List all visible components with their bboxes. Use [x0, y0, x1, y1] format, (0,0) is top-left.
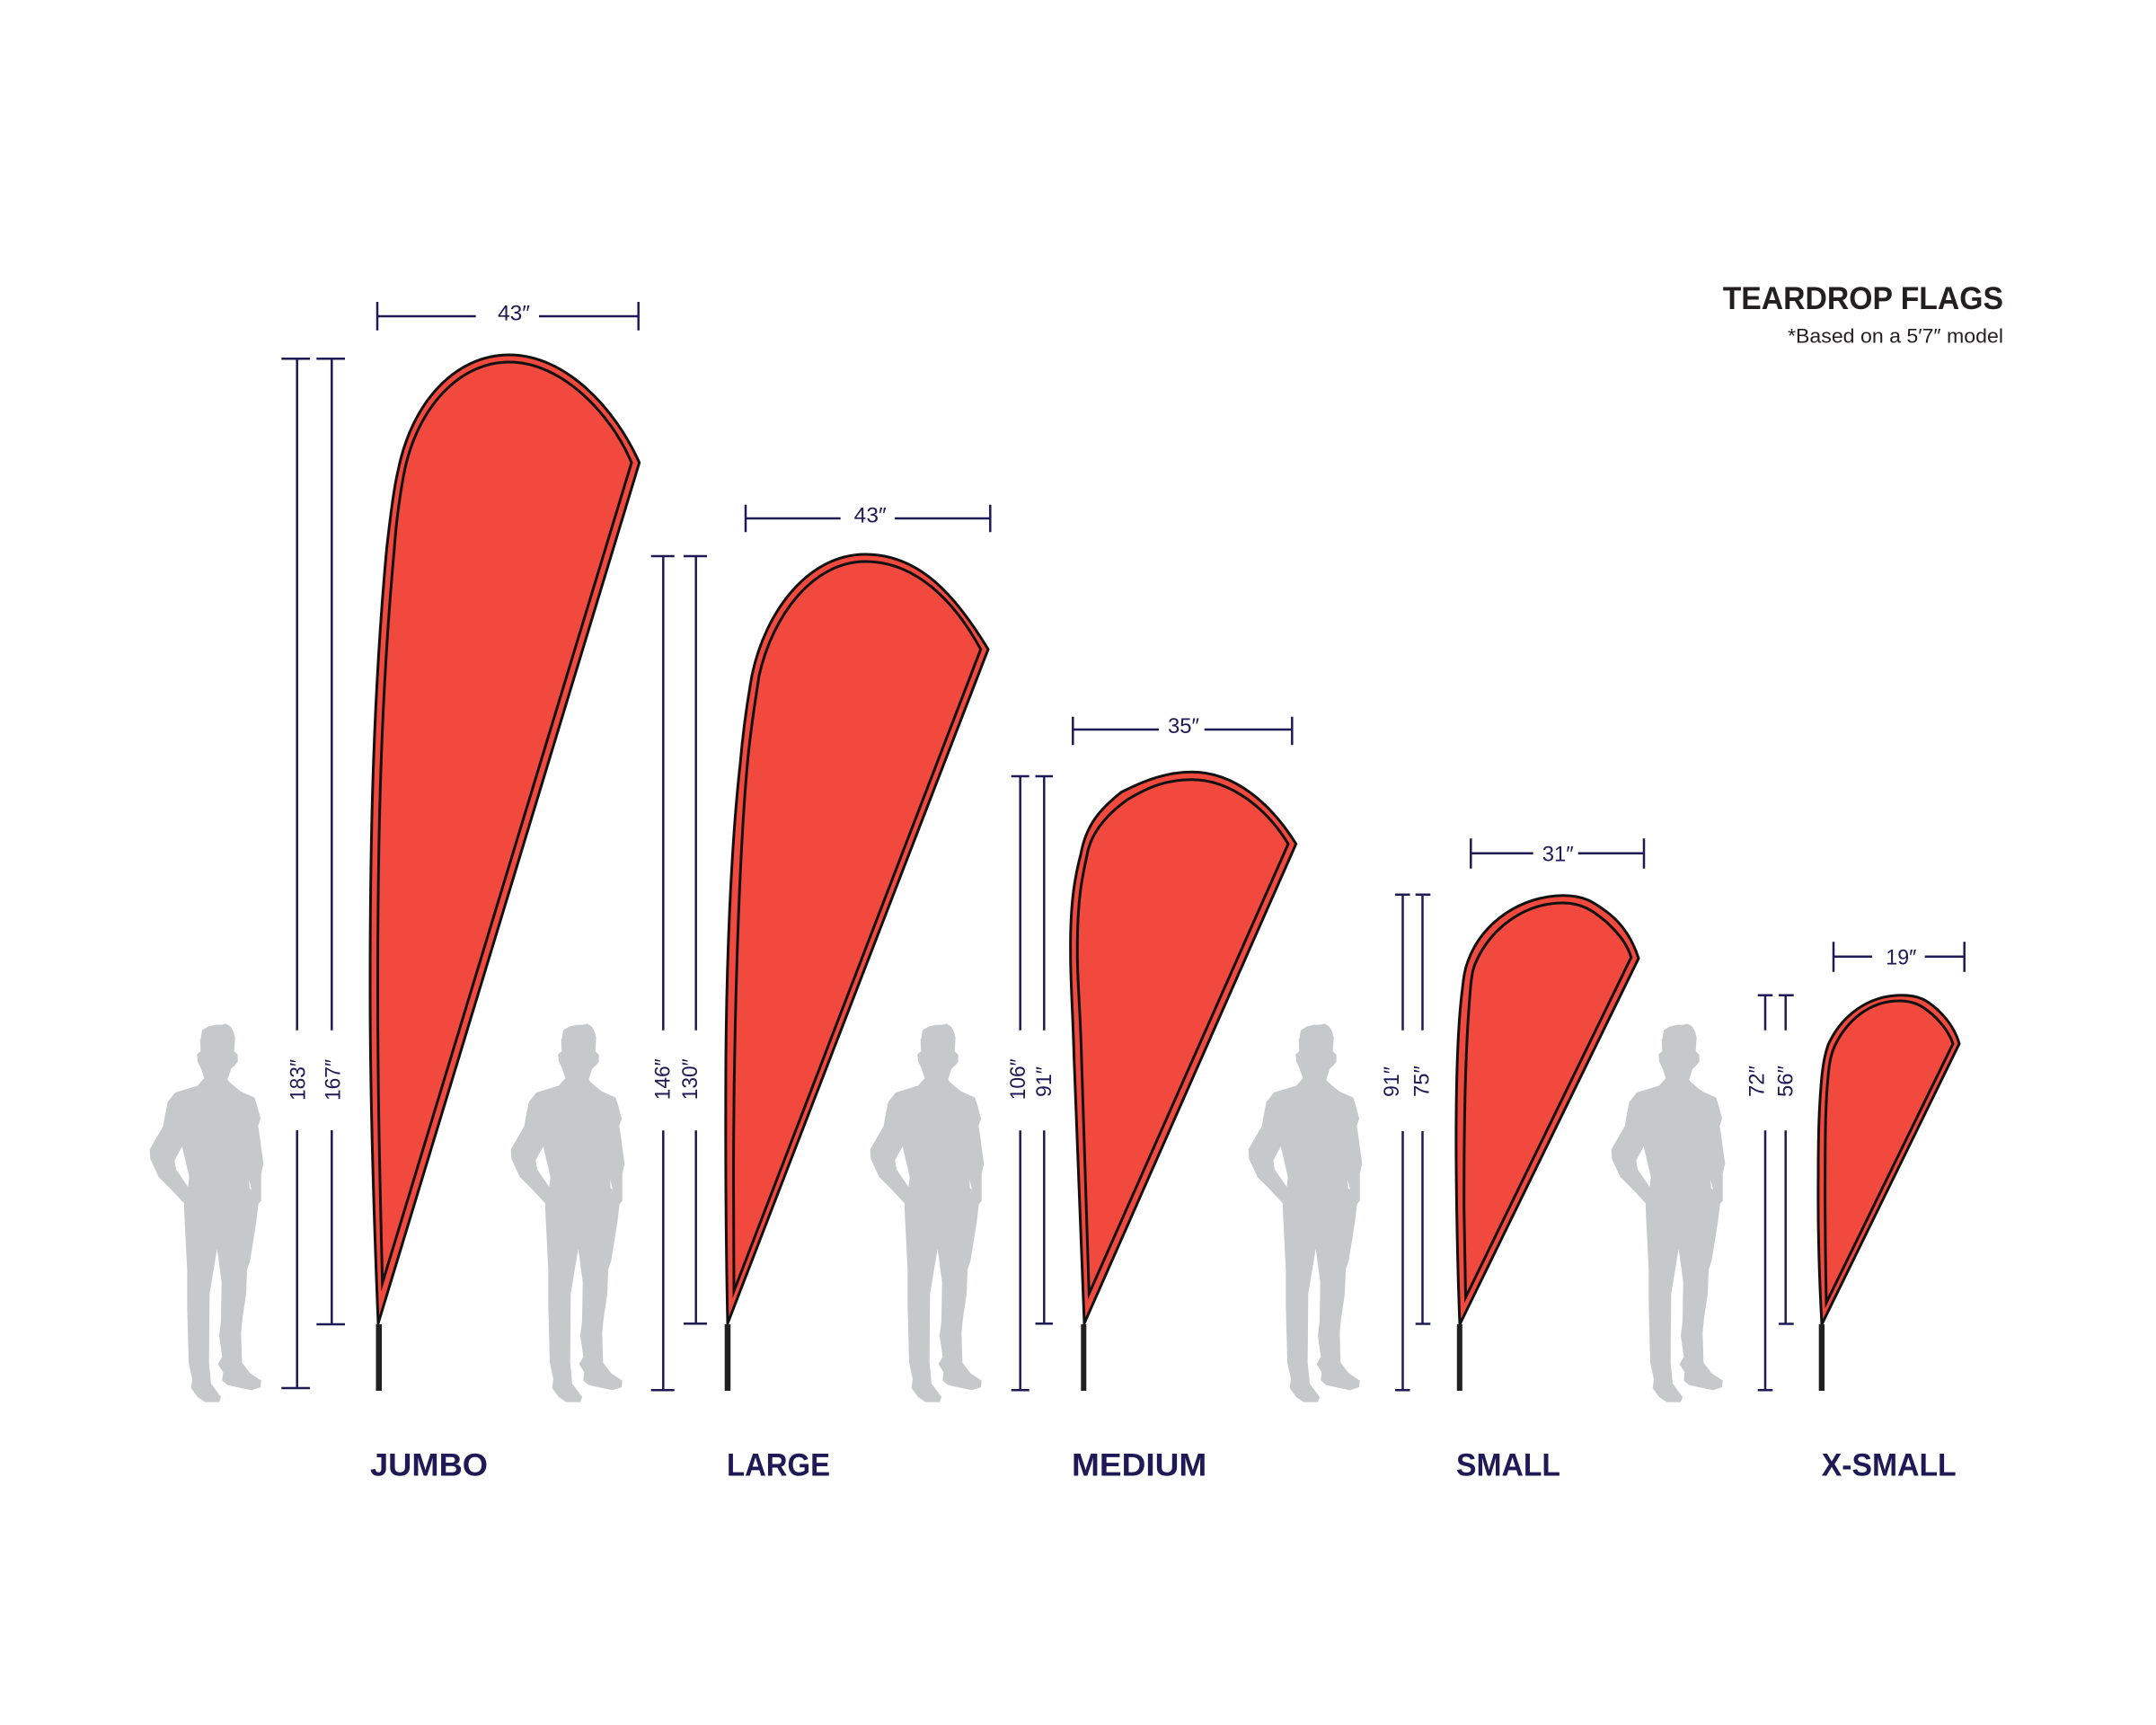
person silhouette: x-small [1612, 1023, 1725, 1402]
title: TEARDROP FLAGS [1723, 281, 2003, 316]
person silhouette: large [511, 1023, 624, 1402]
flag height dimension 91: 91″ [1032, 1066, 1056, 1097]
total height dimension 91 [1380, 895, 1410, 1390]
jumbo group [150, 302, 640, 1482]
width dimension 43: 43″ [854, 504, 887, 528]
large group [511, 504, 990, 1482]
width dimension 31: 31″ [1542, 842, 1574, 866]
total height dimension 72: 72″ [1745, 1066, 1770, 1097]
width dimension 35 [1073, 714, 1292, 745]
small group [1249, 838, 1644, 1482]
width dimension 31 [1471, 838, 1644, 869]
flag height dimension 167 [316, 358, 345, 1324]
total height dimension 72 [1745, 995, 1772, 1390]
label: large: LARGE [727, 1447, 830, 1482]
person silhouette: small [1249, 1023, 1362, 1402]
width dimension 19 [1833, 942, 1965, 972]
total height dimension 91: 91″ [1380, 1066, 1404, 1097]
total height dimension 106 [1006, 776, 1030, 1390]
flag: medium [1071, 772, 1296, 1391]
person silhouette: jumbo [150, 1023, 263, 1402]
width dimension 43: 43″ [498, 302, 531, 326]
flag: large [725, 554, 988, 1391]
label: medium: MEDIUM [1072, 1447, 1206, 1482]
flag height dimension 130: 130″ [678, 1058, 702, 1100]
total height dimension 146 [651, 556, 676, 1390]
person silhouette: medium [870, 1023, 984, 1402]
label: small: SMALL [1456, 1447, 1560, 1482]
width dimension 43 [377, 302, 639, 331]
width dimension 35: 35″ [1168, 714, 1199, 739]
x-small group [1612, 942, 1965, 1482]
width dimension 43 [746, 504, 990, 532]
subtitle note: *Based on a 5′7″ model [1788, 325, 2003, 348]
flag: x-small [1818, 995, 1959, 1391]
total height dimension 106: 106″ [1006, 1058, 1030, 1100]
flag height dimension 75: 75″ [1410, 1066, 1434, 1097]
flag height dimension 75 [1410, 895, 1434, 1324]
flag height dimension 56: 56″ [1773, 1066, 1798, 1097]
flag height dimension 130 [678, 556, 707, 1323]
flag height dimension 91 [1032, 776, 1056, 1323]
flag: jumbo [370, 355, 640, 1391]
width dimension 19: 19″ [1886, 945, 1917, 969]
total height dimension 183: 183″ [286, 1059, 310, 1101]
total height dimension 183 [281, 358, 310, 1388]
medium group [870, 714, 1296, 1482]
total height dimension 146: 146″ [651, 1058, 676, 1100]
flag height dimension 167: 167″ [321, 1059, 345, 1101]
label: x-small: X-SMALL [1822, 1447, 1957, 1482]
flag: small [1456, 896, 1639, 1391]
flag height dimension 56 [1773, 995, 1798, 1324]
label: jumbo: JUMBO [370, 1447, 488, 1482]
